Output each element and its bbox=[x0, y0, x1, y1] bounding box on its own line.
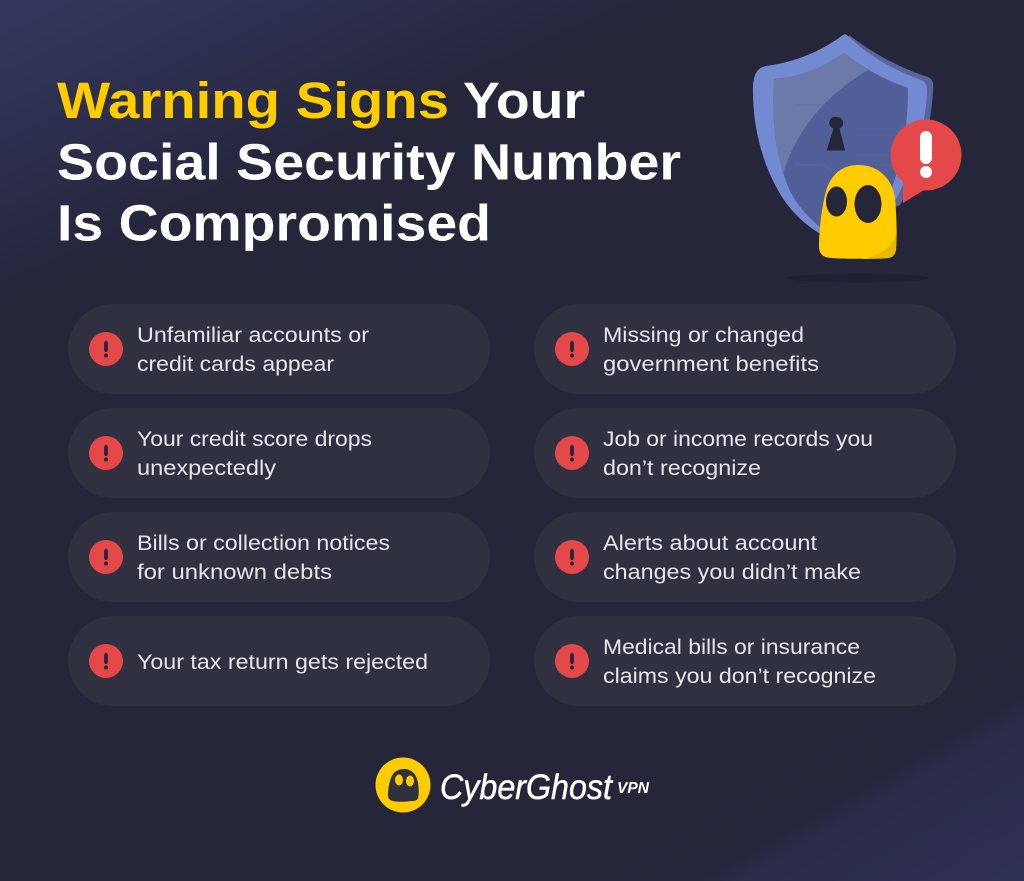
wordmark: CyberGhost bbox=[440, 768, 613, 807]
text bbox=[137, 324, 369, 376]
icon: alert bbox=[89, 644, 123, 678]
text bbox=[603, 324, 819, 376]
icon: alert bbox=[89, 332, 123, 366]
text: Your credit score drops bbox=[137, 428, 372, 451]
icon: alert bbox=[89, 540, 123, 574]
text bbox=[137, 532, 390, 584]
text: unexpectedly bbox=[137, 457, 277, 480]
text: Bills or collection notices bbox=[137, 532, 390, 555]
panel: job or income bbox=[534, 408, 956, 498]
title: Your bbox=[463, 72, 585, 129]
icon: alert bbox=[555, 540, 589, 574]
icon: alert bbox=[89, 436, 123, 470]
title: Social Security Number bbox=[57, 134, 681, 190]
icon: alert bbox=[555, 644, 589, 678]
panel: unfamiliar accounts bbox=[68, 304, 490, 394]
icon: alert bbox=[555, 436, 589, 470]
title bbox=[57, 72, 681, 252]
text: Medical bills or insurance bbox=[603, 636, 860, 659]
icon: shield circuit traces bbox=[782, 105, 902, 190]
text: Missing or changed bbox=[603, 324, 804, 347]
illustration: shield with ghost and alert bbox=[753, 34, 962, 283]
text bbox=[137, 428, 372, 480]
text bbox=[603, 428, 873, 480]
text: don’t recognize bbox=[603, 457, 761, 480]
text: credit cards appear bbox=[137, 353, 334, 376]
panel: medical bills bbox=[534, 616, 956, 706]
wordmark suffix: VPN bbox=[617, 780, 649, 797]
text: claims you don’t recognize bbox=[603, 665, 876, 688]
text: Your tax return gets rejected bbox=[137, 651, 428, 674]
text: for unknown debts bbox=[137, 561, 332, 584]
icon: alert bubble bbox=[890, 120, 962, 203]
icon: keyhole bbox=[826, 117, 845, 150]
text bbox=[603, 532, 861, 584]
panel: bills bbox=[68, 512, 490, 602]
text: Unfamiliar accounts or bbox=[137, 324, 369, 347]
title: Is Compromised bbox=[57, 194, 491, 252]
icon: logo ghost bbox=[376, 758, 430, 812]
text bbox=[603, 636, 876, 688]
text: changes you didn’t make bbox=[603, 561, 861, 584]
icon: shield bbox=[753, 34, 933, 233]
icon: alert bbox=[555, 332, 589, 366]
text: government benefits bbox=[603, 353, 819, 376]
icon: ground shadow bbox=[787, 274, 929, 282]
panel: alerts bbox=[534, 512, 956, 602]
icon: ghost bbox=[819, 165, 897, 259]
panel: credit score bbox=[68, 408, 490, 498]
text: Job or income records you bbox=[603, 428, 873, 451]
logo: CyberGhost VPN bbox=[376, 758, 649, 812]
panel: tax return bbox=[68, 616, 490, 706]
text: Alerts about account bbox=[603, 532, 817, 555]
panel: government benefits bbox=[534, 304, 956, 394]
title: Warning Signs bbox=[57, 72, 449, 129]
